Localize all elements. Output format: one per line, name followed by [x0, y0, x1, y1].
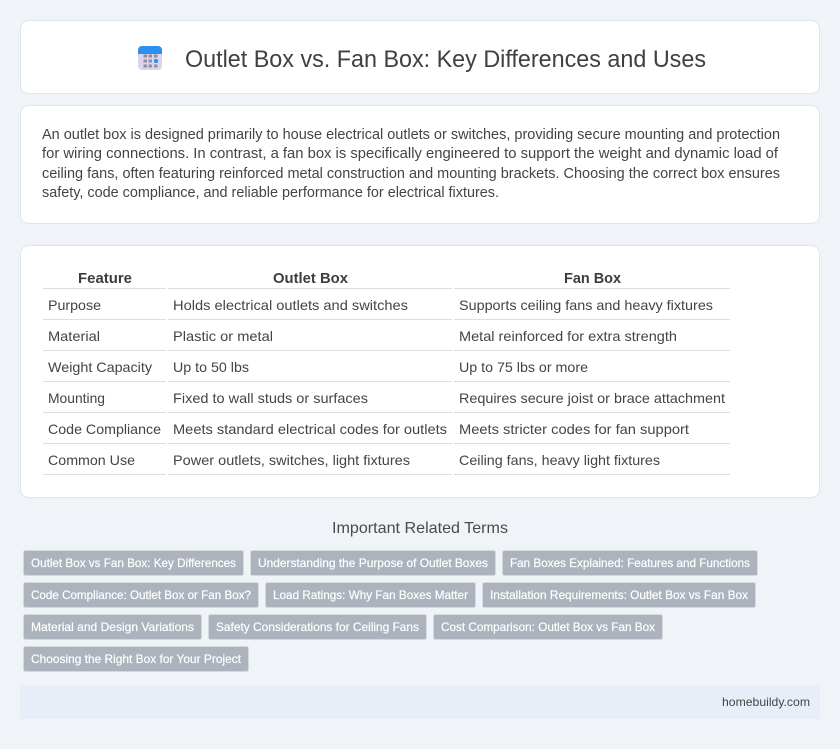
table header: Outlet Box	[273, 270, 349, 287]
heading: important related terms: Important Related Terms	[332, 520, 508, 537]
tag: Choosing the Right Box for Your Project	[31, 652, 242, 666]
table row: material: Material	[48, 328, 100, 344]
title: Outlet Box vs. Fan Box: Key Differences and Uses	[185, 46, 706, 73]
text block: introduction	[42, 127, 780, 201]
tag: Outlet Box vs Fan Box: Key Differences	[31, 556, 236, 570]
table row: weight capacity: Weight Capacity	[48, 359, 152, 375]
tag: Understanding the Purpose of Outlet Boxes	[258, 556, 488, 570]
tag	[24, 582, 258, 608]
panel: header	[20, 20, 820, 94]
tag	[24, 550, 244, 576]
table row: mounting	[48, 390, 725, 406]
panel: introduction	[20, 106, 820, 224]
tag	[24, 646, 248, 672]
footer source text: homebuildy.com	[722, 695, 810, 709]
table row: code compliance	[48, 421, 689, 437]
tag: Fan Boxes Explained: Features and Functions	[510, 556, 750, 570]
table row: purpose	[48, 297, 713, 313]
tag	[266, 582, 476, 608]
tag	[24, 614, 202, 640]
panel: comparison table	[20, 246, 820, 498]
footer	[20, 685, 820, 719]
text block: introduction: for wiring connections. In contrast, a fan box is specifically engineered to support the weight and dynamic load of	[42, 146, 779, 162]
text block: introduction: An outlet box is designed primarily to house electrical outlets or switches, providing secure mounting and protection	[42, 127, 780, 143]
table header: Fan Box	[564, 270, 622, 287]
table row: purpose: Supports ceiling fans and heavy fixtures	[459, 297, 713, 313]
table row: common use: Ceiling fans, heavy light fixtures	[459, 452, 660, 468]
table row: code compliance: Meets standard electrical codes for outlets	[173, 421, 447, 437]
table row: code compliance: Meets stricter codes for fan support	[459, 421, 689, 437]
tag: Cost Comparison: Outlet Box vs Fan Box	[441, 620, 655, 634]
table row: common use: Common Use	[48, 452, 135, 468]
table header	[78, 270, 622, 287]
icon: calendar grid	[138, 46, 162, 70]
table row: common use: Power outlets, switches, light fixtures	[173, 452, 410, 468]
table row: weight capacity	[48, 359, 588, 375]
tag	[434, 614, 662, 640]
table row: material: Metal reinforced for extra strength	[459, 328, 677, 344]
related term tags	[24, 550, 758, 672]
text block: introduction: safety, code compliance, and reliable performance for electrical fixtures.	[42, 185, 499, 201]
table row: material	[48, 328, 677, 344]
table row: weight capacity: Up to 75 lbs or more	[459, 359, 588, 375]
tag: Load Ratings: Why Fan Boxes Matter	[273, 588, 468, 602]
table row: weight capacity: Up to 50 lbs	[173, 359, 249, 375]
table row: mounting: Mounting	[48, 390, 105, 406]
table row: code compliance: Code Compliance	[48, 421, 161, 437]
tag	[250, 550, 496, 576]
tag: Material and Design Variations	[31, 620, 194, 634]
tag: Code Compliance: Outlet Box or Fan Box?	[31, 588, 251, 602]
table header: Feature	[78, 270, 132, 287]
tag	[502, 550, 758, 576]
table row: common use	[48, 452, 660, 468]
table row: purpose: Purpose	[48, 297, 101, 313]
table row: mounting: Requires secure joist or brace attachment	[459, 390, 725, 406]
table row: purpose: Holds electrical outlets and switches	[173, 297, 408, 313]
tag	[482, 582, 756, 608]
tag: Installation Requirements: Outlet Box vs Fan Box	[490, 588, 748, 602]
tag	[208, 614, 426, 640]
text block: introduction: ceiling fans, often featuring reinforced metal construction and mounting brackets. Choosing the correct box ensures	[42, 166, 780, 182]
tag: Safety Considerations for Ceiling Fans	[216, 620, 419, 634]
table row: material: Plastic or metal	[173, 328, 273, 344]
table row: mounting: Fixed to wall studs or surfaces	[173, 390, 368, 406]
